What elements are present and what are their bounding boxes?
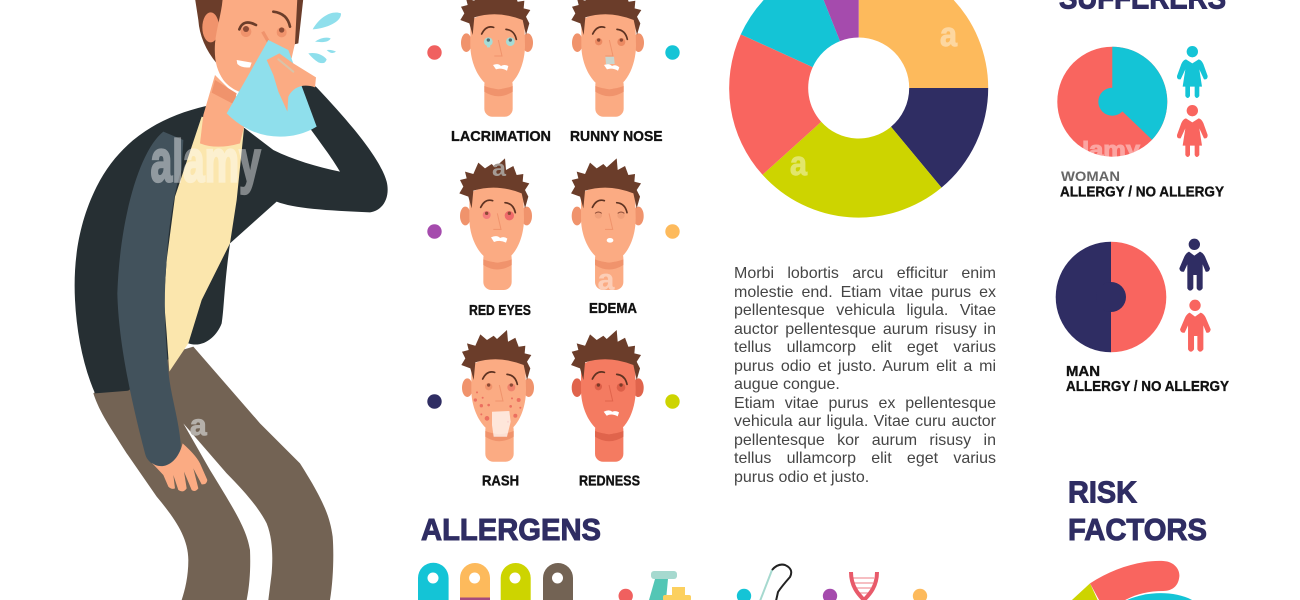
- icon: cleaning spray: [649, 571, 691, 600]
- slice: cyan: [741, 0, 840, 67]
- pie chart: woman: alamy: [1068, 137, 1141, 162]
- body text: purus odio et justo. Aurum elit a mi: [734, 358, 996, 375]
- face: redness: [571, 330, 644, 462]
- allergen dot: cyan: [737, 589, 751, 600]
- watermark: a: [190, 409, 207, 442]
- body text: Etiam vitae purus ex pellentesque: [734, 395, 996, 412]
- body text: pellentesque vehicula ligula. Vitae: [734, 302, 996, 319]
- watermark patch: [492, 411, 511, 437]
- symptom dot: cyan: [665, 45, 680, 60]
- watermark: a: [940, 16, 958, 54]
- eyes: [595, 383, 625, 392]
- segment: lime: [1068, 583, 1100, 600]
- ear: [202, 12, 219, 42]
- allergen pill: orange: [460, 563, 490, 600]
- symptom dot: red: [427, 45, 442, 60]
- allergen dot: orange: [913, 589, 927, 600]
- face: [215, 0, 297, 94]
- hair: [195, 0, 303, 63]
- nasal discharge: [605, 57, 615, 64]
- allergen dot: red: [618, 589, 633, 600]
- eyes: [485, 383, 515, 391]
- puffy eyes: [595, 211, 625, 219]
- heading: risk factors: RISK: [1068, 474, 1138, 510]
- watermark: a: [492, 155, 507, 181]
- neck shadow: [212, 80, 237, 104]
- rash spots: [474, 391, 521, 423]
- slice: orange: [859, 0, 988, 88]
- label: red eyes: RED EYES: [469, 303, 531, 319]
- label: woman: WOMAN: [1061, 168, 1120, 184]
- watermark: a: [598, 263, 615, 296]
- symptom dot: lime: [665, 394, 680, 409]
- trousers: [93, 347, 333, 600]
- sore eyes: [595, 38, 625, 46]
- risk factors chart: [1068, 561, 1195, 600]
- jacket body: [75, 83, 388, 393]
- symptom dot: purple: [427, 224, 442, 239]
- icon: man, allergy: [1179, 239, 1210, 291]
- pie chart: woman: [1057, 47, 1167, 162]
- mouth: [491, 236, 507, 243]
- icon: DNA helix: [851, 572, 877, 600]
- donut chart: [729, 0, 988, 218]
- upper hand: [267, 53, 316, 112]
- mouth: [493, 64, 508, 71]
- icon: woman, no allergy: [1177, 105, 1208, 157]
- allergen pill: lime: [501, 563, 531, 600]
- icon: woman, allergy: [1177, 46, 1208, 98]
- label: man allergy legend: ALLERGY / NO ALLERGY: [1066, 379, 1229, 395]
- face: red eyes: [459, 155, 532, 290]
- face: rash: [461, 330, 534, 462]
- body text: purus odio et justo.: [734, 469, 869, 486]
- mouth: [607, 238, 613, 243]
- allergen pill: cyan: [418, 563, 449, 600]
- label: woman allergy legend: ALLERGY / NO ALLERGY: [1060, 185, 1224, 201]
- heading: risk factors: FACTORS: [1068, 512, 1207, 547]
- slice: purple: [811, 0, 859, 41]
- teary eyes: [484, 37, 515, 47]
- slice: lime: [762, 122, 942, 218]
- label: redness: REDNESS: [579, 474, 640, 490]
- shirt: [164, 117, 244, 372]
- symptom dot: orange: [665, 224, 680, 239]
- body text: auctor pellentesque aurum risusy in: [734, 321, 996, 338]
- body text: augue congue.: [734, 376, 840, 393]
- watermark: a: [790, 145, 808, 183]
- body text: tellus ullamcorp elit eget varius: [734, 450, 996, 467]
- facial features: [237, 12, 290, 68]
- label: edema: EDEMA: [589, 301, 637, 317]
- tissue: [227, 40, 317, 137]
- allergen pill: brown: [543, 563, 573, 600]
- label: lacrimation: LACRIMATION: [451, 129, 551, 145]
- red eyes: [483, 211, 514, 220]
- heading: allergens: ALLERGENS: [421, 512, 601, 547]
- label: runny nose: RUNNY NOSE: [570, 129, 663, 145]
- body text: [734, 265, 996, 486]
- face: runny nose: [571, 0, 644, 117]
- body text: vehicula aur ligula. Vitae curu auctor: [734, 413, 996, 430]
- slice: navy: [891, 88, 988, 188]
- face: edema: [571, 158, 644, 296]
- symptom dot: navy: [427, 394, 442, 409]
- lower hand: [152, 443, 207, 491]
- label: rash: RASH: [482, 474, 519, 490]
- icon: man, no allergy: [1180, 300, 1211, 352]
- body text: tellus ullamcorp elit eget varius: [734, 339, 996, 356]
- watermark: alamy: [151, 128, 261, 195]
- segment: red: [1090, 561, 1179, 600]
- pie chart: man: [1056, 242, 1166, 352]
- face: lacrimation: [460, 0, 533, 117]
- allergen dot: purple: [823, 589, 837, 600]
- slice: red: [729, 34, 821, 175]
- mouth: [604, 64, 619, 71]
- segment: cyan: [1118, 593, 1195, 600]
- heading: risk factors: [1068, 474, 1207, 547]
- finger crease: [278, 59, 293, 72]
- label: man: MAN: [1066, 364, 1100, 380]
- body text: Morbi lobortis arcu efficitur enim: [734, 265, 996, 282]
- body text: molestie end. Etiam vitae purus ex: [734, 284, 996, 301]
- sneeze droplets: [308, 12, 341, 63]
- character: sneezing man: [75, 0, 388, 600]
- mouth: [604, 410, 619, 416]
- neck: [200, 75, 244, 147]
- icon: hair strand: [760, 565, 791, 600]
- jacket sleeve: [117, 132, 183, 467]
- body text: pellentesque kor aurum risusy in: [734, 432, 996, 449]
